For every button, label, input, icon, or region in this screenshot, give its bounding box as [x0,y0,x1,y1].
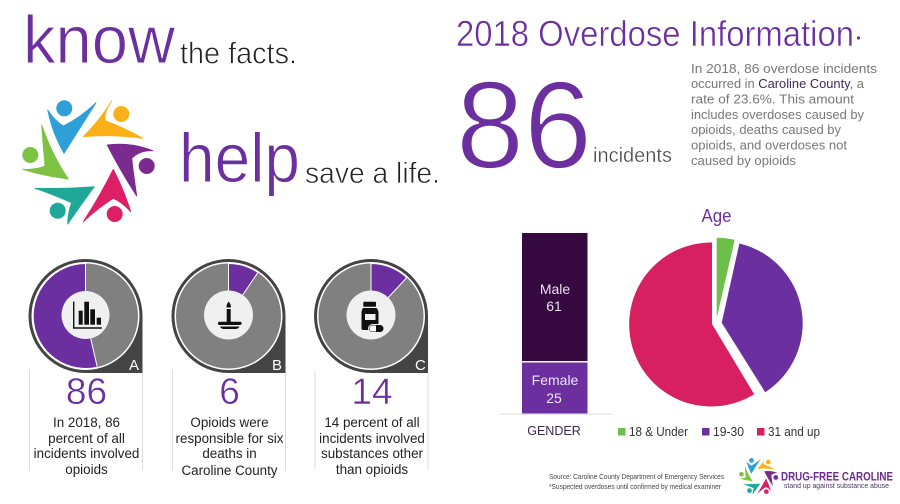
logo: Drug-Free Caroline: stand up against substance abuse [784,481,889,490]
corner label A: A [129,357,139,374]
corner label C: C [415,357,426,374]
donut chart B [172,259,286,373]
text block: overdose description: includes overdoses caused by [691,107,864,122]
chart: gender stacked bar: Male [540,281,570,297]
text block: overdose description: In 2018, 86 overdose incidents [691,61,877,76]
chart: age pie [629,238,803,406]
text block: overdose description: rate of 23.6%. This amount [691,92,854,106]
donut chart C [314,259,428,373]
source note: Source: Caroline County Department of Emergency Services [549,472,724,481]
legend: age groups: 31 and up [768,424,820,439]
caption B: responsible for six [176,431,284,446]
big stat: 86 incidents: incidents [593,145,672,167]
caption A: opioids [65,462,108,477]
chart: gender stacked bar: Female [532,372,579,388]
chart: gender stacked bar: 61 [546,298,562,314]
title: 2018 Overdose Information: 2018 Overdose Information [456,13,854,54]
chart: gender stacked bar: GENDER [527,424,581,438]
caption B: Caroline County [181,463,278,478]
caption B: deaths in [202,446,257,461]
text block: overdose description: opioids, deaths caused by [691,122,841,137]
panel: card B [172,259,286,478]
icon: circle of people logo [22,100,155,224]
caption A: percent of all [48,431,125,446]
chart: gender stacked bar [500,233,613,438]
panel: card A [28,259,142,477]
caption A: incidents involved [34,446,139,461]
heading: know the facts: know [23,2,176,78]
caption C: substances other [321,446,424,461]
heading: help save a life: save a life. [305,157,440,190]
caption B [176,415,284,478]
corner label B: B [272,357,282,374]
caption C: incidents involved [319,431,425,446]
heading: know the facts [23,2,297,78]
legend: age groups: 19-30 [713,424,744,439]
legend: age groups [618,424,820,439]
big stat: 86 incidents: 86 [456,57,592,195]
text block: overdose description: occurred in Caroline County, a [691,76,865,91]
big stat: 86 incidents [456,57,672,195]
caption A: In 2018, 86 [53,415,120,430]
stat: 86: 86 [66,371,107,412]
heading: help save a life: help [179,119,300,197]
icon: small circle of people [739,458,778,495]
source note: *Suspected overdoses until confirmed by medical examiner [549,482,721,491]
footnote marker [857,36,860,40]
legend: age groups: 18 & Under [629,424,689,439]
source note [549,472,724,491]
icon: bar chart [73,302,102,329]
caption C [319,415,425,477]
caption C: than opioids [336,462,408,477]
caption A [34,415,139,477]
panel: card C [314,259,428,477]
donut chart A [28,259,142,373]
text block: overdose description: opioids, and overdoses not [691,138,847,152]
caption C: 14 percent of all [324,415,420,430]
heading: know the facts: the facts. [180,36,297,70]
chart: gender stacked bar: 25 [546,390,562,406]
caption B: Opioids were [190,415,269,430]
logo: Drug-Free Caroline [739,458,893,495]
icon: candle [218,302,242,329]
stat: 14: 14 [351,371,393,412]
text block: overdose description: caused by opioids [691,153,796,168]
icon: pill bottle [362,302,384,332]
heading: Age: Age [702,206,732,226]
text block: overdose description [691,61,877,168]
heading: help save a life [179,119,440,197]
stat: 6: 6 [219,371,240,412]
